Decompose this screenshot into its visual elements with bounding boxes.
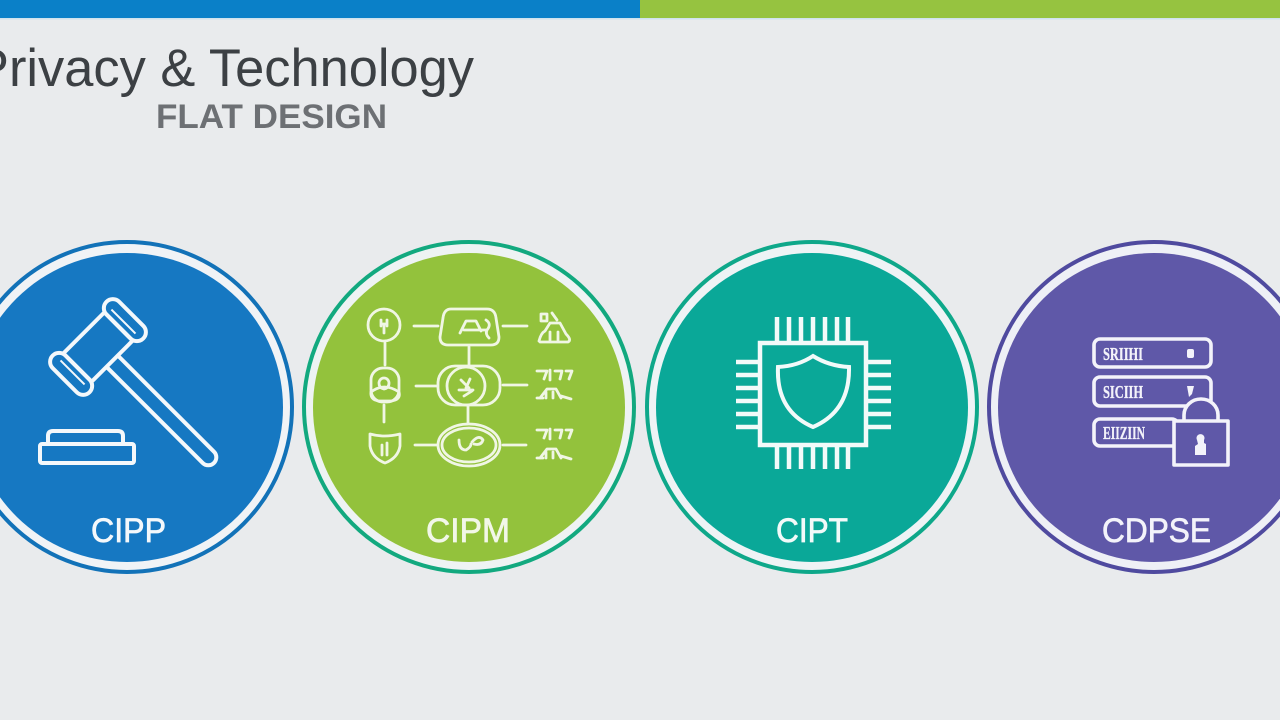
icon: chip with shield [736, 317, 891, 469]
top bar: blue and green [0, 0, 1280, 20]
circle badge: CIPT [647, 242, 977, 572]
label: CDPSE: CDPSE [1102, 512, 1211, 550]
subtitle: FLAT DESIGN [156, 98, 387, 136]
panel: CIPM [304, 242, 634, 572]
label: CIPM: CIPM [426, 512, 510, 550]
icon: server racks with padlock [1094, 339, 1228, 465]
circle badge: CIPM [304, 242, 634, 572]
icon: gavel [40, 295, 247, 496]
panel: CIPP [0, 242, 292, 572]
circle badge: CDPSE [989, 242, 1280, 572]
circle badge: CIPP [0, 242, 292, 572]
icon: server racks with padlock: SICIIH [1103, 382, 1143, 402]
panel: CIPT [647, 242, 977, 572]
icon: server racks with padlock: EIIZIIN [1103, 423, 1145, 443]
label: CIPT: CIPT [776, 512, 848, 550]
panel: CDPSE [989, 242, 1280, 572]
icon: server racks with padlock: SRIIHI [1103, 344, 1143, 364]
icon: process flow diagram [368, 309, 572, 466]
label: CIPP: CIPP [91, 512, 166, 550]
